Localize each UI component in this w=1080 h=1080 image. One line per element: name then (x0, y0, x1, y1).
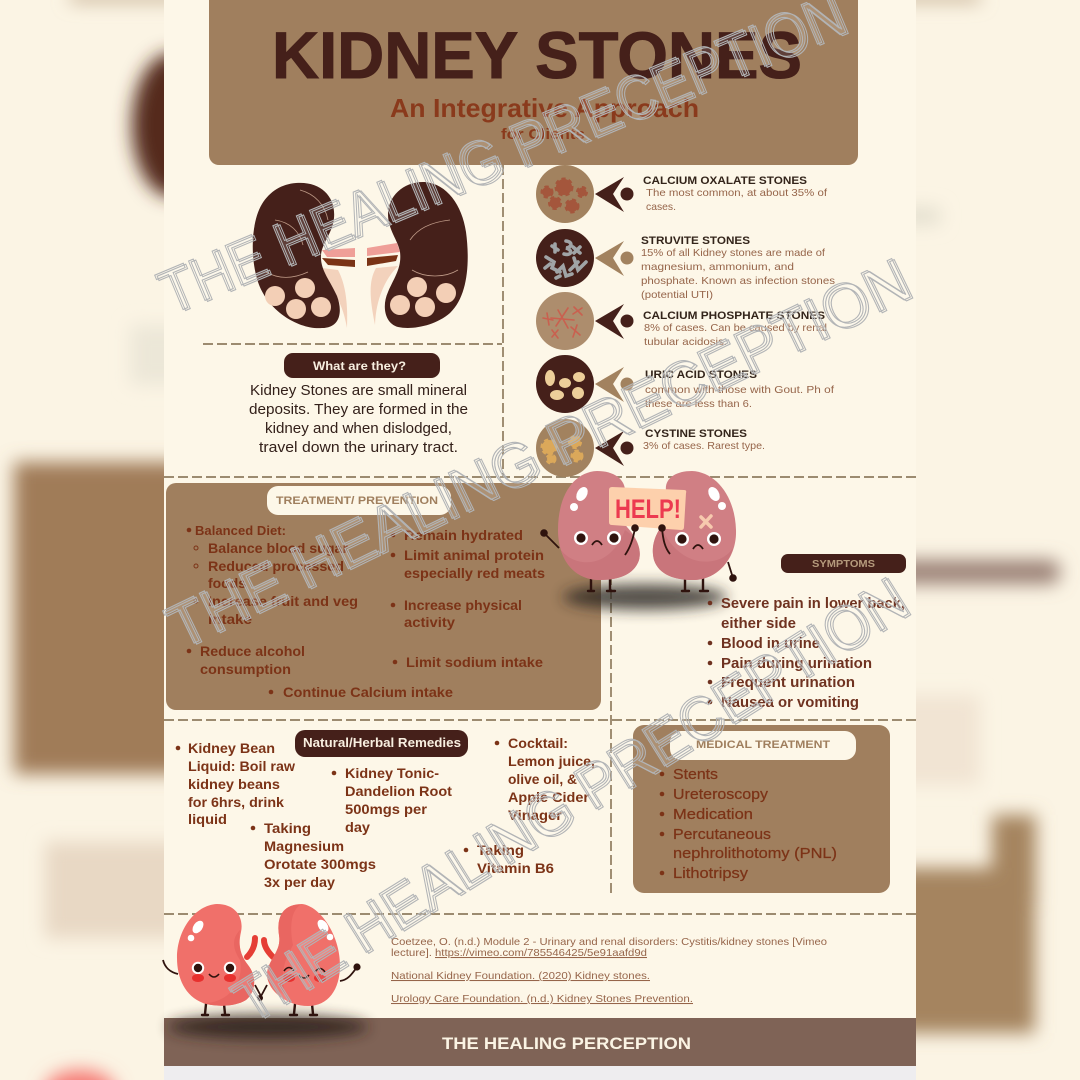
treatment list: Reduce alcohol (200, 643, 305, 659)
natural remedies list: Vitamin B6 (477, 860, 554, 876)
references: Coetzee, O. (n.d.) Module 2 - Urinary and renal disorders: Cystitis/kidney stones [Vimeo (391, 936, 827, 948)
stone type: calcium oxalate: CALCIUM OXALATE STONES (643, 175, 807, 187)
natural remedies list: Taking (264, 820, 311, 836)
dashed dividers (164, 165, 916, 914)
watermark: THE HEALING PRECEPTION (221, 564, 920, 1037)
symptoms list: either side (721, 616, 796, 632)
panel: treatment and prevention (166, 483, 601, 710)
treatment list: Remain hydrated (404, 527, 523, 543)
natural remedies list: Apple Cider (508, 789, 590, 805)
illustration: sad kidneys holding help sign (540, 471, 737, 610)
treatment list: consumption (200, 661, 291, 677)
panel heading: TREATMENT/ PREVENTION (276, 495, 438, 507)
footer band: THE HEALING PERCEPTION (442, 1034, 691, 1053)
natural remedies list: day (345, 819, 370, 835)
stone type: uric acid: URIC ACID STONES (645, 369, 757, 381)
stone type: struvite: 15% of all Kidney stones are made of (641, 247, 825, 259)
subtitle: An Integrative Approach (390, 93, 699, 123)
watermark: THE HEALING PRECEPTION (156, 245, 921, 663)
symptoms list (708, 596, 905, 711)
natural remedies list: kidney beans (188, 776, 280, 792)
definition text: travel down the urinary tract. (259, 439, 458, 456)
references: lecture]. (391, 947, 432, 959)
badge: what are they (284, 353, 440, 378)
watermark: THE HEALING PRECEPTION (159, 246, 923, 664)
medical treatment list: Lithotripsy (673, 865, 749, 882)
natural remedies list: Kidney Tonic- (345, 765, 439, 781)
stone type: uric acid (536, 355, 834, 413)
symptoms list: Nausea or vomiting (721, 695, 859, 711)
definition text (249, 382, 468, 456)
badge: symptoms (781, 554, 906, 573)
natural remedies list: Kidney Bean (188, 740, 275, 756)
treatment list: intake (208, 611, 252, 627)
medical treatment list: Medication (673, 806, 753, 823)
stone type: calcium phosphate (536, 292, 827, 350)
kidney anatomy illustration (253, 182, 468, 328)
stone type: calcium oxalate: The most common, at about 35% of (646, 187, 827, 199)
treatment list: Balanced Diet: (195, 523, 286, 538)
treatment list: Reduced processed (208, 558, 344, 574)
references: https://vimeo.com/785546425/5e91aafd9d (435, 947, 647, 959)
definition text: kidney and when dislodged, (265, 420, 452, 437)
help sign: HELP! (615, 494, 681, 524)
treatment list: Limit animal protein (404, 547, 544, 563)
medical treatment list: Ureteroscopy (673, 786, 769, 803)
medical treatment list: Stents (673, 766, 718, 783)
badge: natural herbal remedies (295, 730, 468, 757)
badge: what are they: What are they? (313, 361, 406, 373)
stone type: uric acid: common with those with Gout. Ph of (645, 384, 834, 396)
natural remedies list: Orotate 300mgs (264, 856, 376, 872)
treatment list: Limit sodium intake (406, 654, 543, 670)
natural remedies list: for 6hrs, drink (188, 794, 284, 810)
header panel (209, 0, 858, 165)
natural remedies list: Taking (477, 842, 524, 858)
watermark: THE HEALING PRECEPTION (223, 565, 922, 1038)
illustration: happy kidneys high five (163, 904, 368, 1039)
stone type: calcium phosphate: CALCIUM PHOSPHATE STONES (643, 310, 825, 322)
symptoms list: Blood in urine (721, 636, 820, 652)
subtitle line two: for Clients (501, 126, 585, 143)
medical treatment list (660, 766, 837, 882)
natural remedies list: Lemon juice, (508, 753, 595, 769)
treatment list: Continue Calcium intake (283, 684, 453, 700)
badge: symptoms: SYMPTOMS (812, 559, 875, 570)
stone type: struvite: magnesium, ammonium, and (641, 261, 794, 273)
symptoms list: Pain during urination (721, 656, 872, 672)
natural remedies list (176, 735, 595, 890)
treatment list: foods (208, 575, 246, 591)
references: Urology Care Foundation. (n.d.) Kidney Stones Prevention. (391, 993, 693, 1005)
stone type: struvite: (potential UTI) (641, 289, 713, 301)
natural remedies list: olive oil, & (508, 771, 577, 787)
treatment list: activity (404, 614, 455, 630)
stone type: struvite (536, 229, 835, 301)
treatment list: Increase fruit and veg (208, 593, 358, 609)
medical treatment list: Percutaneous (673, 826, 771, 843)
treatment list: especially red meats (404, 565, 545, 581)
stone type: cystine: 3% of cases. Rarest type. (643, 440, 765, 452)
definition text: deposits. They are formed in the (249, 401, 468, 418)
natural remedies list: Dandelion Root (345, 783, 452, 799)
stone type: struvite: STRUVITE STONES (641, 235, 750, 247)
natural remedies list: Liquid: Boil raw (188, 758, 295, 774)
panel heading: MEDICAL TREATMENT (696, 739, 830, 751)
panel heading (670, 731, 856, 760)
watermark (149, 0, 923, 1038)
natural remedies list: Cocktail: (508, 735, 568, 751)
symptoms list: Severe pain in lower back, (721, 596, 905, 612)
stone type: struvite: phosphate. Known as infection stones (641, 275, 835, 287)
natural remedies list: 500mgs per (345, 801, 428, 817)
stone type: calcium phosphate: tubular acidosis. (644, 336, 727, 348)
natural remedies list: Vinager (508, 807, 563, 823)
natural remedies list: Magnesium (264, 838, 344, 854)
treatment list (187, 523, 545, 700)
treatment list: Balance blood sugar (208, 540, 349, 556)
references: National Kidney Foundation. (2020) Kidney stones. (391, 970, 650, 982)
title: KIDNEY STONES (272, 18, 802, 92)
medical treatment list: nephrolithotomy (PNL) (673, 845, 837, 862)
references (391, 936, 827, 1005)
panel: medical treatment (633, 725, 890, 893)
stone type: calcium oxalate: cases. (646, 201, 676, 213)
natural remedies list: liquid (188, 811, 227, 827)
stone type: uric acid: these are less than 6. (645, 398, 752, 410)
badge: natural herbal remedies: Natural/Herbal Remedies (303, 736, 461, 750)
stone type: calcium oxalate (536, 165, 827, 223)
natural remedies list: 3x per day (264, 874, 335, 890)
definition text: Kidney Stones are small mineral (250, 382, 467, 399)
treatment list: Increase physical (404, 597, 522, 613)
stone type: calcium phosphate: 8% of cases. Can be caused by renal (644, 322, 827, 334)
page background (164, 0, 916, 1080)
help sign (609, 487, 686, 530)
symptoms list: Frequent urination (721, 675, 855, 691)
stone type: cystine: CYSTINE STONES (645, 428, 747, 440)
footer band (164, 1018, 916, 1080)
panel heading (267, 486, 451, 515)
stone type: cystine (536, 419, 765, 477)
